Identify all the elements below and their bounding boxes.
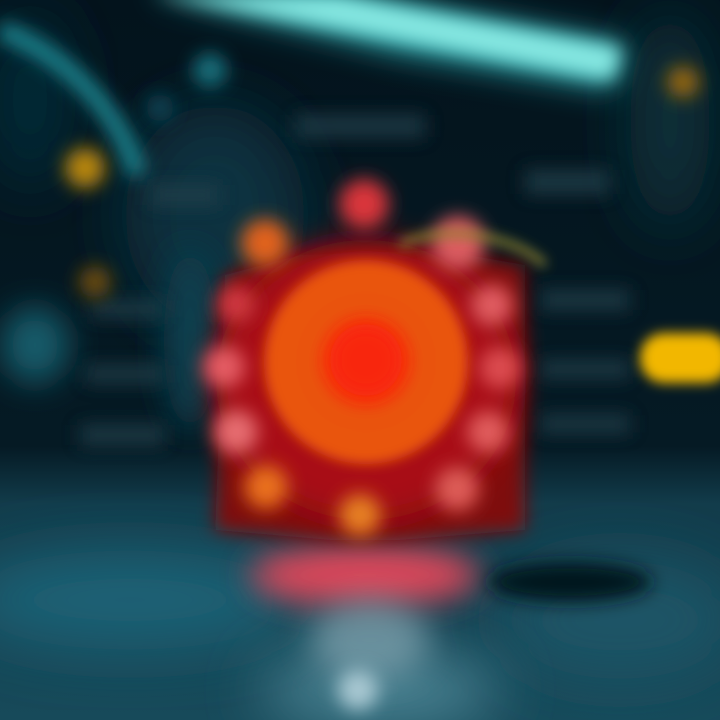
yellow pill right xyxy=(640,333,720,383)
yellow wire near top right of panel xyxy=(400,234,545,265)
orbit nodes xyxy=(203,179,521,536)
amber dot top right xyxy=(667,66,699,98)
amber dots left xyxy=(65,148,111,298)
floor reflection xyxy=(250,543,480,710)
curved teal arc xyxy=(0,30,138,175)
teal blob left xyxy=(1,307,69,383)
top neon light bar xyxy=(150,0,625,88)
inner red glow xyxy=(216,240,516,520)
central orange disc xyxy=(264,260,468,464)
red panel xyxy=(215,250,525,540)
dark device on floor xyxy=(488,562,652,602)
teal dots upper left xyxy=(146,53,227,122)
faint panel text rows xyxy=(80,115,630,445)
